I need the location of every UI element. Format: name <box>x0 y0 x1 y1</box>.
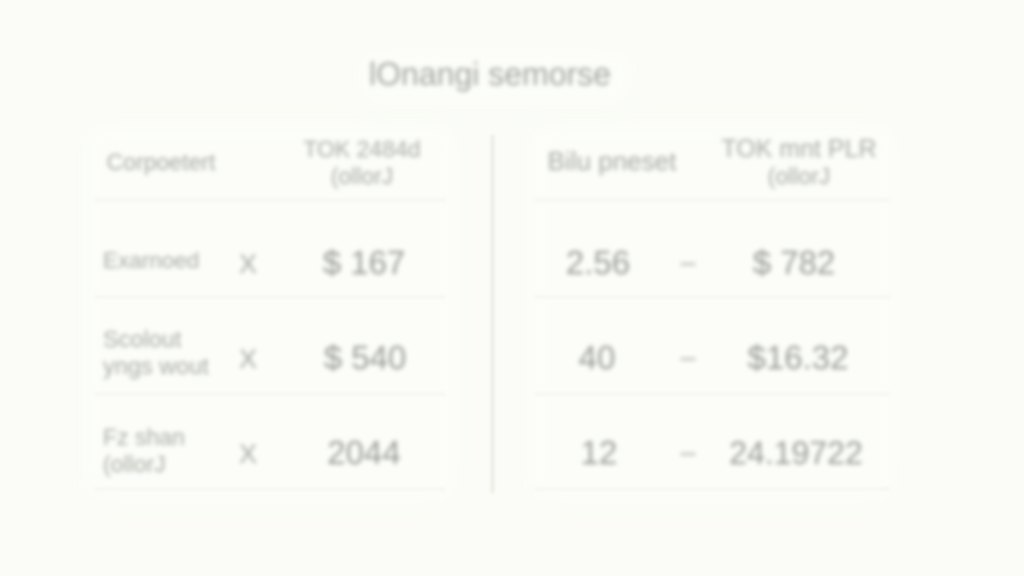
header: right column two <box>720 135 878 190</box>
header: right column two: (ollorJ <box>768 163 830 189</box>
row 1: X <box>239 249 257 279</box>
row 2: $ 540 <box>324 339 406 376</box>
title: lOnangi semorse <box>369 56 611 92</box>
row 2: 40 <box>579 339 615 376</box>
row 2: – <box>680 342 696 372</box>
vertical divider <box>491 135 494 493</box>
row 2: X <box>239 344 257 374</box>
row 1: $ 782 <box>753 244 835 281</box>
row 2: $16.32 <box>748 339 848 376</box>
row 3: – <box>680 437 696 467</box>
header: left column two <box>303 136 422 190</box>
row 2: Scolout <box>103 326 181 352</box>
row 2: yngs wout <box>103 353 209 379</box>
header: right column two: TOK mnt PLR <box>721 135 877 163</box>
row 1: $ 167 <box>323 244 405 281</box>
header: left column one: Corpoetert <box>107 149 215 175</box>
row 3: 2044 <box>327 434 401 471</box>
row 3: 12 <box>581 434 617 471</box>
row 3: Fz shan <box>103 424 185 450</box>
header: left column two: (ollorJ <box>331 163 393 189</box>
header: right column one: Bilu pneset <box>548 146 676 176</box>
row 1: 2.56 <box>566 244 630 281</box>
row 3: X <box>239 439 257 469</box>
row 3: 24.19722 <box>729 435 863 471</box>
row 3: (ollorJ <box>103 451 166 477</box>
row 1: – <box>680 247 696 277</box>
row 1: Exarnoed <box>103 248 199 273</box>
header: left column two: TOK 2484d <box>303 136 421 162</box>
